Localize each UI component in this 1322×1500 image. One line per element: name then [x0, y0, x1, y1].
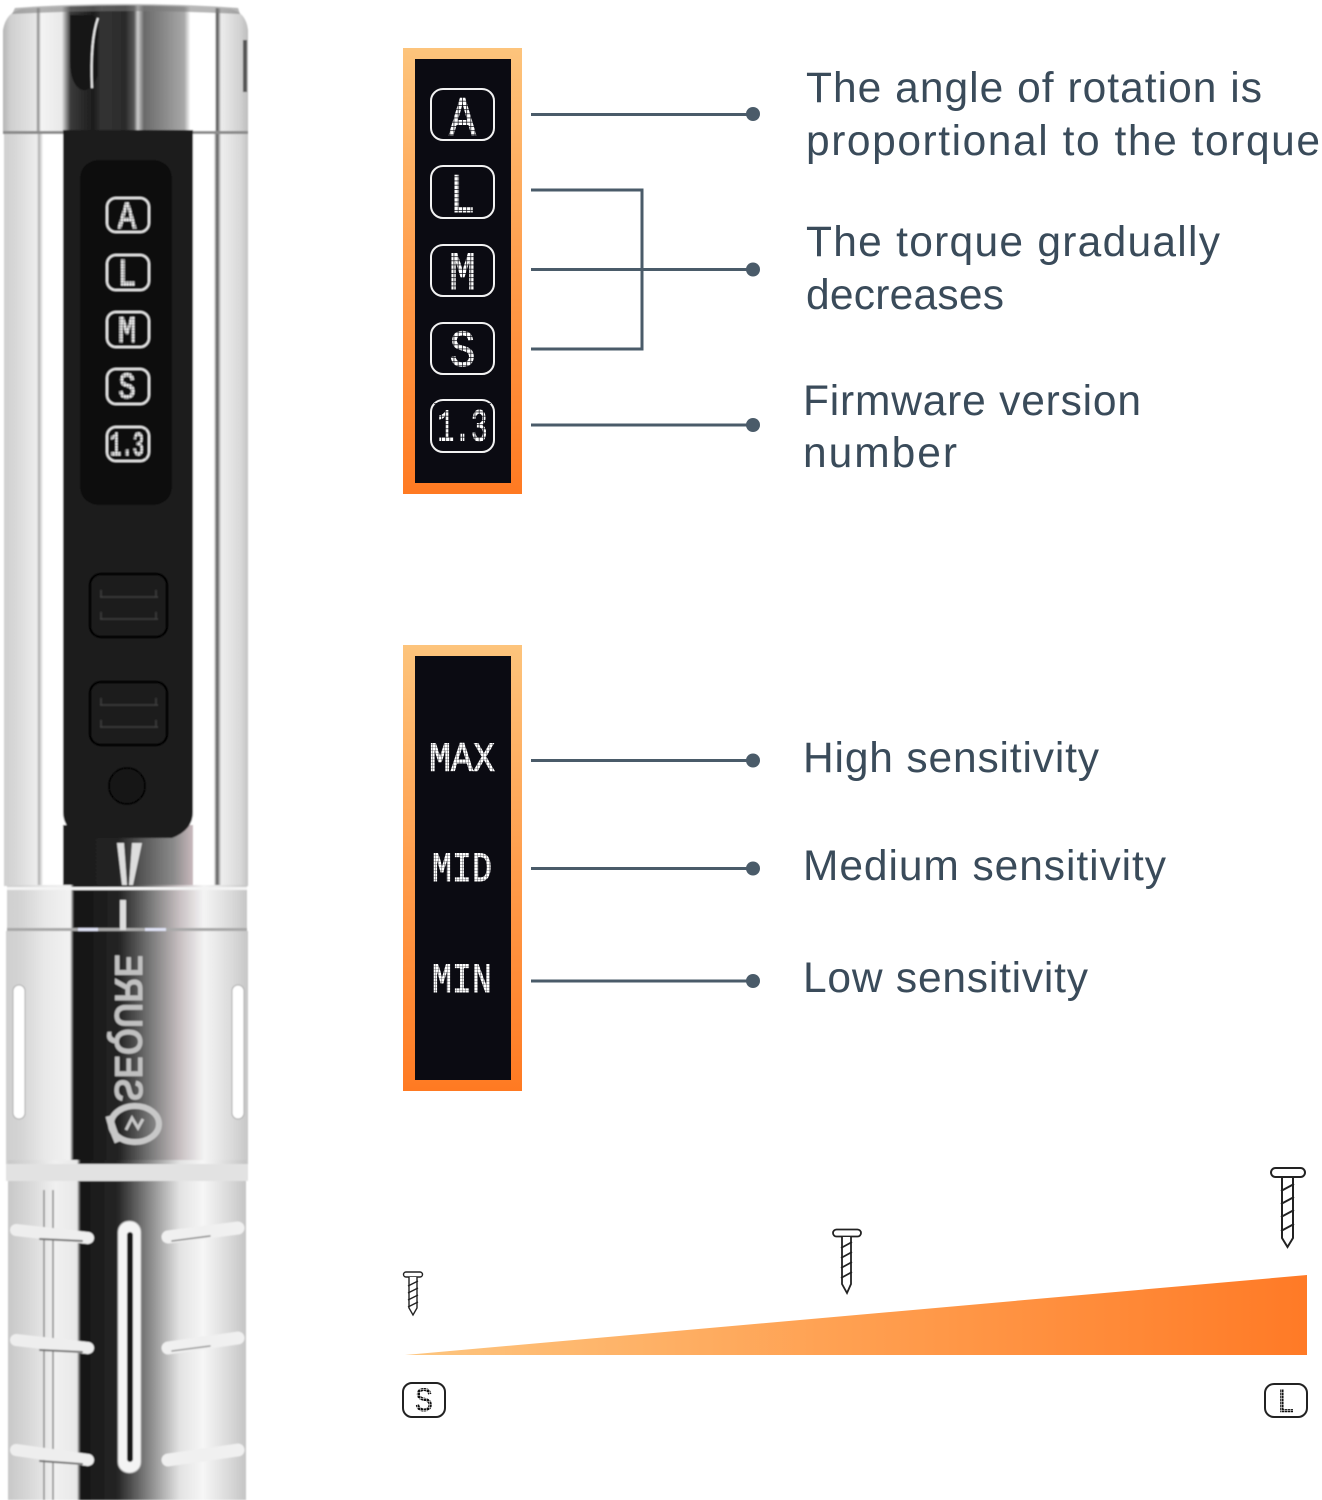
pen icon A: A — [118, 197, 136, 240]
tail section — [8, 1160, 246, 1500]
text: low sensitivity: Low sensitivity — [803, 955, 1089, 1002]
black screen — [415, 656, 511, 1080]
text: rotation angle: proportional to the torque — [806, 118, 1320, 165]
badge firmware version: 1.3 — [438, 403, 488, 455]
pen icon L: L — [118, 254, 136, 297]
text: high sensitivity: High sensitivity — [803, 735, 1100, 782]
pen icon version: 1.3 — [110, 428, 144, 465]
connector: medium sensitivity — [531, 862, 760, 876]
text: firmware version: number — [803, 430, 957, 477]
control panel — [63, 130, 193, 838]
connector: high sensitivity — [531, 754, 760, 768]
label MID: MID — [432, 846, 492, 894]
panel indicator light — [109, 768, 145, 804]
panel: sensitivity display — [403, 645, 522, 1091]
badge L — [431, 165, 494, 229]
torque scale chart — [403, 1168, 1307, 1423]
pen icon A — [107, 197, 149, 240]
badge A — [431, 88, 494, 152]
product photo: torque screwdriver — [3, 4, 248, 1500]
connector: torque bracket — [531, 190, 760, 349]
text: medium sensitivity: Medium sensitivity — [803, 843, 1167, 890]
tail ring — [6, 1164, 248, 1181]
text: rotation angle — [806, 65, 1320, 165]
brand mark mirrored: SEQURE — [106, 954, 150, 1102]
badge M — [431, 245, 494, 306]
text: firmware version: Firmware version — [803, 378, 1141, 425]
orange frame — [403, 48, 522, 494]
torque wedge — [405, 1275, 1307, 1355]
driver body — [4, 134, 248, 886]
badge A: A — [449, 88, 476, 152]
connector: low sensitivity — [531, 974, 760, 988]
text: rotation angle: The angle of rotation is — [806, 65, 1262, 112]
barrel section — [6, 931, 248, 1166]
badge S — [431, 323, 494, 382]
black screen — [415, 59, 511, 483]
tail right notches — [168, 1228, 238, 1460]
badge M: M — [449, 245, 476, 306]
connector: rotation note — [531, 107, 760, 121]
badge L large end: L — [1277, 1385, 1295, 1423]
text: torque decreases: decreases — [806, 272, 1004, 319]
panel: torque display — [403, 48, 522, 494]
panel button upper — [90, 574, 167, 637]
text: torque decreases — [806, 219, 1221, 319]
badge L large end — [1265, 1384, 1307, 1423]
panel button lower — [90, 682, 167, 745]
icon: large screw — [1271, 1168, 1305, 1247]
pen icon L — [107, 254, 149, 297]
barrel side slots — [13, 985, 244, 1119]
pen icon S: S — [118, 368, 136, 409]
badge S small end: S — [415, 1384, 433, 1422]
pen icon S — [107, 368, 149, 409]
label MAX: MAX — [429, 736, 495, 784]
lower chrome reflection — [63, 825, 193, 885]
collar band — [7, 885, 247, 931]
text: torque decreases: The torque gradually — [806, 219, 1221, 266]
label MIN: MIN — [432, 957, 492, 1005]
icon: medium screw — [833, 1230, 861, 1293]
brand logo — [109, 1106, 159, 1142]
tail center slot — [118, 1221, 141, 1473]
pen icon M: M — [118, 311, 136, 354]
tail left notches — [16, 1230, 88, 1464]
connector: firmware note — [531, 418, 760, 432]
tail left vertical lines — [44, 1190, 53, 1500]
badge S: S — [450, 323, 476, 382]
pen screen icons — [107, 197, 149, 465]
orange frame — [403, 645, 522, 1091]
badge S small end — [403, 1383, 445, 1422]
icon: small screw — [404, 1272, 422, 1315]
badge L: L — [450, 165, 475, 229]
pen icon M — [107, 311, 149, 354]
badge firmware version — [431, 400, 494, 455]
text: firmware version — [803, 378, 1141, 477]
driver cap — [3, 4, 248, 134]
pen icon version — [107, 427, 149, 465]
